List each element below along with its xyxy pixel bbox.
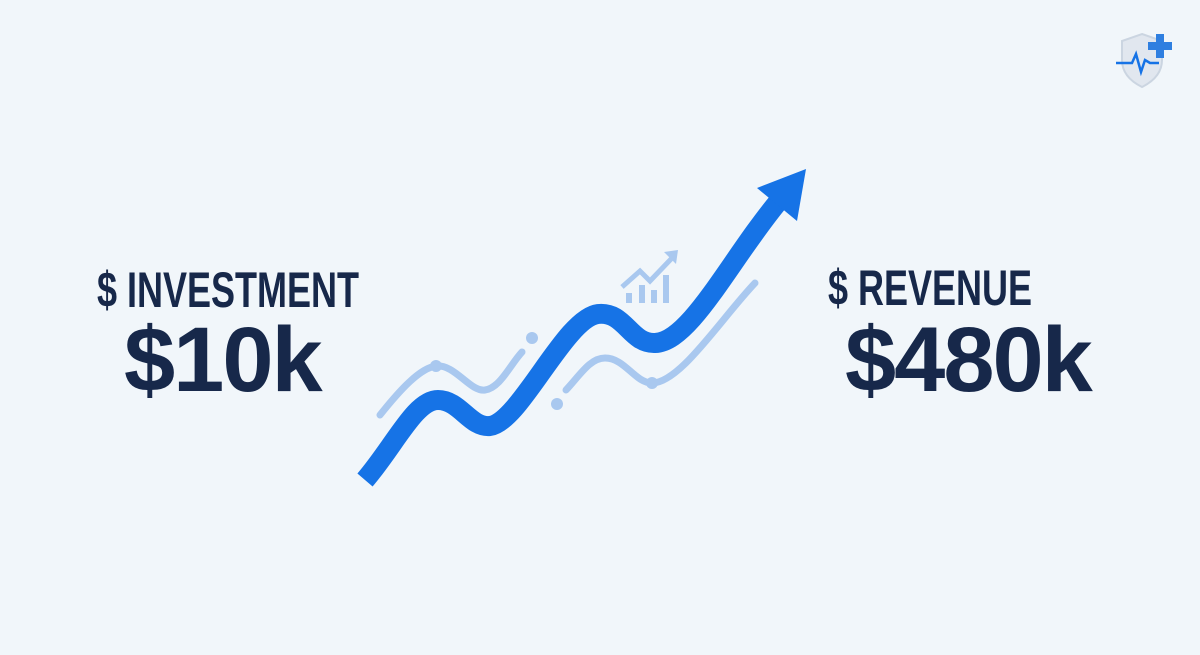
icon: shield with plus	[1116, 34, 1172, 87]
value: $480k: $480k	[845, 309, 1091, 411]
label: investment: $ INVESTMENT	[97, 262, 359, 318]
light trend lines	[380, 283, 755, 415]
icon: small bar chart	[622, 250, 678, 303]
main arrow	[365, 169, 806, 480]
value: $10k: $10k	[124, 309, 321, 411]
label: revenue: $ REVENUE	[828, 260, 1032, 316]
